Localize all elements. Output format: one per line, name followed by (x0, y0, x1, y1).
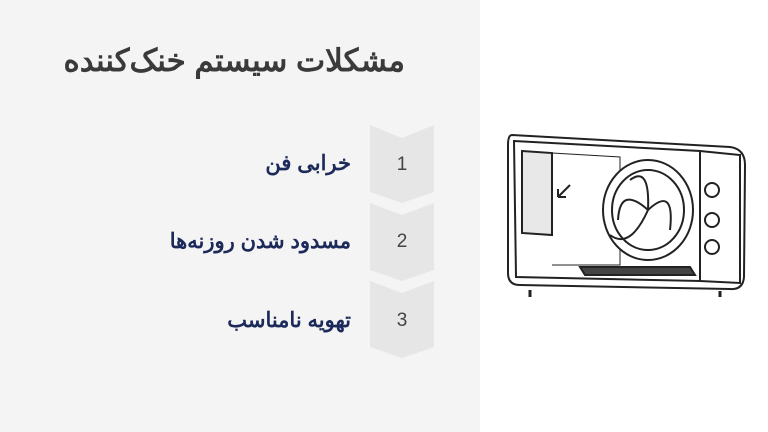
item 2 text: مسدود شدن روزنه‌ها (170, 230, 351, 253)
chevrons (370, 125, 434, 358)
number 2: 2 (397, 231, 407, 252)
number 3: 3 (397, 310, 407, 331)
item 3 text: تهویه نامناسب (227, 309, 351, 332)
item 1 text: خرابی فن (265, 152, 351, 175)
panel: left background (0, 0, 480, 432)
number 1: 1 (397, 154, 407, 175)
title: مشکلات سیستم خنک‌کننده (64, 43, 405, 78)
illustration: oven with fan (507, 134, 746, 297)
